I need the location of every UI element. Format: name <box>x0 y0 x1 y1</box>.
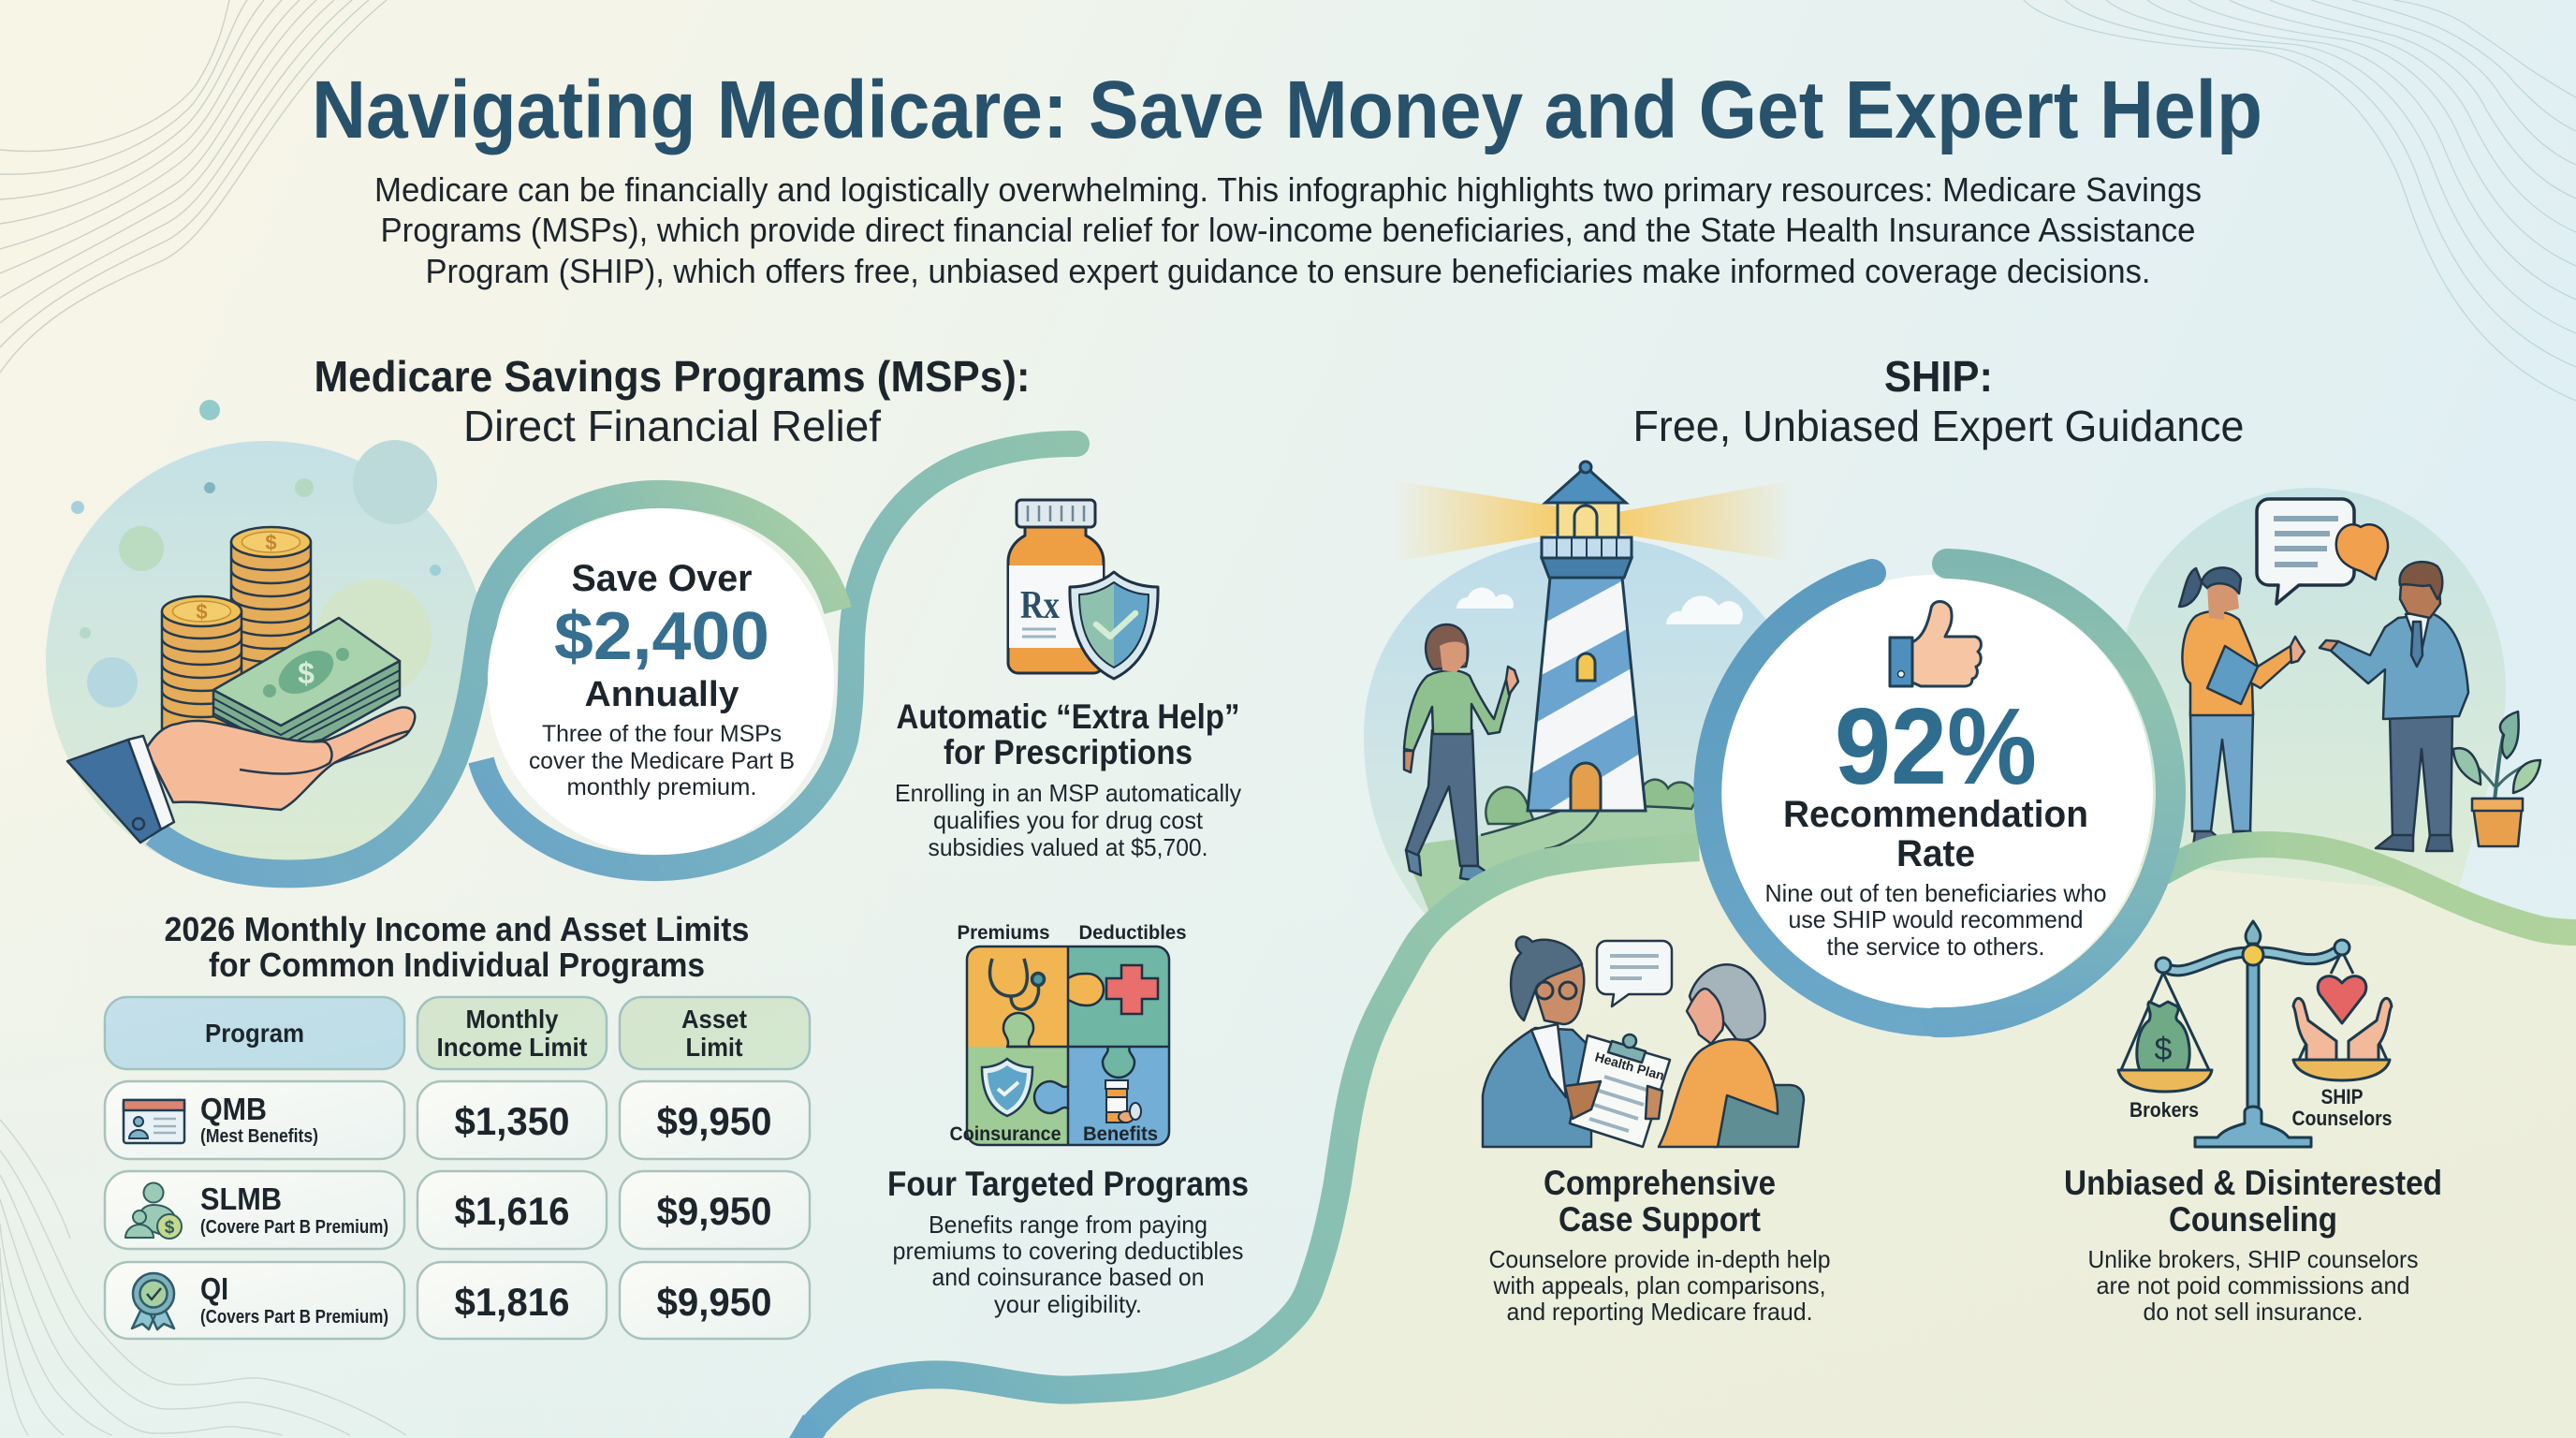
row: QMB: QMB <box>200 1092 267 1126</box>
icon: people with coin: $ <box>165 1218 175 1238</box>
row: QI: QI <box>200 1271 228 1306</box>
man in suit <box>2320 562 2468 851</box>
heading: MSP section: Direct Financial Relief <box>463 402 881 450</box>
puzzle labels <box>949 922 1187 1145</box>
walking woman <box>1404 624 1518 883</box>
woman with tablet <box>2179 567 2305 851</box>
row: QMB: $1,350 <box>455 1099 569 1143</box>
puzzle labels: Benefits <box>1083 1123 1158 1145</box>
clouds <box>1456 588 1743 624</box>
text: case support: with appeals, plan comparisons, <box>1493 1271 1825 1299</box>
background circle <box>2118 488 2506 894</box>
stat circle: save over $2,400: Annually <box>584 675 739 714</box>
counselor <box>1483 1028 1591 1147</box>
puzzle labels: Coinsurance <box>949 1123 1061 1145</box>
stat circle: save over $2,400: Three of the four MSPs <box>542 721 782 747</box>
table header: Income Limit <box>436 1033 588 1062</box>
row: SLMB: (Covere Part B Premium) <box>200 1217 388 1238</box>
illustration: counselor with client: Health Plan <box>1593 1049 1666 1083</box>
background wave lines: top right <box>2024 0 2576 401</box>
scale labels <box>2130 1085 2393 1130</box>
icon: award ribbon <box>132 1273 174 1329</box>
illustration: lighthouse scene <box>1364 462 1794 922</box>
stat circle: 92% recommendation rate: Recommendation <box>1783 794 2088 835</box>
intro paragraph <box>374 170 2202 290</box>
row: QI <box>105 1262 810 1339</box>
scale labels: Brokers <box>2130 1098 2199 1122</box>
cash stack <box>213 618 400 749</box>
text: automatic extra help: subsidies valued at $5,700. <box>929 833 1208 861</box>
text: four targeted programs: premiums to covering deductibles <box>893 1237 1243 1265</box>
potted plant <box>2453 712 2540 846</box>
clipboard <box>1570 1035 1670 1147</box>
row: SLMB: $1,616 <box>455 1189 569 1233</box>
text: unbiased counseling: Unlike brokers, SHIP counselors <box>2087 1245 2419 1273</box>
text: unbiased counseling <box>2064 1164 2442 1326</box>
text: four targeted programs <box>887 1165 1249 1318</box>
panel: automatic extra help <box>895 500 1241 861</box>
front coin stack: $ <box>196 600 208 624</box>
chair <box>1714 1085 1804 1147</box>
intro paragraph: Program (SHIP), which offers free, unbiased expert guidance to ensure beneficiaries make informed coverage decisions. <box>425 252 2151 290</box>
intro paragraph: Medicare can be financially and logistically overwhelming. This infographic highlights two primary resources: Medicare Savings <box>374 170 2202 209</box>
front coin stack <box>162 596 242 730</box>
background wave lines: top left <box>0 0 387 373</box>
row: SLMB: $9,950 <box>657 1189 771 1233</box>
illustration: savings circle with bubbles <box>46 400 488 883</box>
text: automatic extra help: Enrolling in an MSP automatically <box>895 779 1241 807</box>
red cross <box>1106 965 1158 1014</box>
stat circle: save over $2,400: cover the Medicare Part B <box>529 748 795 774</box>
suit cuff <box>67 740 161 843</box>
icon: thumbs up <box>1890 601 1981 686</box>
text: unbiased counseling: Counseling <box>2169 1200 2337 1239</box>
income and asset limits table <box>105 997 810 1339</box>
panel: unbiased counseling <box>2064 921 2442 1326</box>
row: QI: (Covers Part B Premium) <box>200 1307 388 1328</box>
illustration: hand holding money <box>67 527 415 843</box>
table header: Asset <box>681 1005 747 1034</box>
intro paragraph: Programs (MSPs), which provide direct financial relief for low-income beneficiaries, and the State Health Insurance Assistance <box>380 211 2196 249</box>
icon: ID card <box>124 1100 184 1143</box>
wave bands <box>154 431 2576 1438</box>
text: four targeted programs: and coinsurance based on <box>932 1263 1204 1291</box>
text: case support: Counselore provide in-depth help <box>1488 1245 1831 1273</box>
lighthouse <box>1526 462 1647 824</box>
title: Navigating Medicare: Save Money and Get Expert Help <box>312 65 2262 155</box>
client <box>1659 1039 1778 1147</box>
stat circle: 92% recommendation rate: Nine out of ten beneficiaries who <box>1765 879 2106 907</box>
light beams <box>1393 480 1794 562</box>
stethoscope <box>990 959 1045 1009</box>
small shield <box>982 1059 1032 1116</box>
heading: MSP section: Medicare Savings Programs (MSPs): <box>315 352 1030 401</box>
icon: people with coin <box>125 1183 182 1239</box>
text: case support <box>1488 1164 1831 1326</box>
table header: Monthly <box>466 1005 559 1034</box>
text: case support: Comprehensive <box>1544 1164 1776 1202</box>
scale labels: SHIP <box>2321 1085 2363 1108</box>
heading: SHIP section: Free, Unbiased Expert Guidance <box>1632 402 2245 450</box>
right-hand lower cream panel <box>805 844 2576 1438</box>
illustration: balance scale: $ <box>2155 1032 2173 1067</box>
scale labels: Counselors <box>2291 1107 2393 1130</box>
row: QMB: (Mest Benefits) <box>200 1126 318 1147</box>
table heading <box>165 910 749 984</box>
icon: puzzle <box>949 922 1187 1145</box>
stat circle: save over $2,400: $2,400 <box>554 599 769 674</box>
heading: SHIP section: SHIP: <box>1884 352 1993 401</box>
panel: comprehensive case support <box>1483 937 1831 1326</box>
text: unbiased counseling: do not sell insurance. <box>2144 1298 2363 1326</box>
table heading: 2026 Monthly Income and Asset Limits <box>165 910 749 948</box>
table header <box>105 997 810 1069</box>
small bottle <box>1105 1080 1141 1123</box>
text: four targeted programs: your eligibility. <box>994 1290 1142 1318</box>
hill <box>1407 780 1699 922</box>
illustration: people talking <box>2118 488 2540 894</box>
icon: prescription bottle with shield <box>1008 500 1158 679</box>
stat circle: save over $2,400: Save Over <box>571 558 753 599</box>
stat circle: 92% recommendation rate <box>1707 564 2171 1022</box>
text: automatic extra help <box>895 697 1241 861</box>
text: four targeted programs: Four Targeted Programs <box>887 1165 1249 1203</box>
back coin stack <box>231 527 311 683</box>
speech bubble <box>2257 499 2388 604</box>
sky circle <box>1364 537 1778 922</box>
text: unbiased counseling: Unbiased & Disinterested <box>2064 1164 2442 1202</box>
row: QI: $9,950 <box>657 1280 771 1324</box>
background wave lines: bottom left <box>0 1120 406 1435</box>
text: four targeted programs: Benefits range from paying <box>929 1211 1208 1239</box>
table header: Program <box>205 1019 304 1048</box>
row: SLMB: SLMB <box>200 1181 282 1216</box>
panel: four targeted programs <box>887 922 1249 1318</box>
hand <box>146 708 415 810</box>
stat circle: save over $2,400 <box>488 508 834 855</box>
stat circle: save over $2,400: monthly premium. <box>567 774 756 800</box>
icon: prescription bottle with shield: Rx <box>1020 584 1060 627</box>
illustration: balance scale <box>2118 921 2392 1147</box>
speech bubble <box>1597 941 1672 1006</box>
text: case support: and reporting Medicare fraud. <box>1507 1298 1812 1326</box>
heading: MSP section <box>315 352 1030 450</box>
table heading: for Common Individual Programs <box>209 946 705 984</box>
back coin stack: $ <box>265 531 277 554</box>
stat circle: 92% recommendation rate: the service to others. <box>1827 932 2044 961</box>
text: automatic extra help: Automatic “Extra Help” <box>897 697 1239 736</box>
table header: Limit <box>685 1033 743 1062</box>
row: QI: $1,816 <box>455 1280 569 1324</box>
puzzle labels: Premiums <box>957 922 1050 944</box>
heading: SHIP section <box>1632 352 2245 450</box>
text: automatic extra help: qualifies you for drug cost <box>933 806 1204 834</box>
puzzle labels: Deductibles <box>1078 922 1187 944</box>
text: unbiased counseling: are not poid commissions and <box>2097 1271 2409 1299</box>
row: QMB <box>105 1081 810 1159</box>
text: automatic extra help: for Prescriptions <box>944 733 1193 771</box>
row: QMB: $9,950 <box>657 1099 771 1143</box>
text: case support: Case Support <box>1559 1200 1761 1239</box>
stat circle: 92% recommendation rate: use SHIP would recommend <box>1788 905 2084 933</box>
stat circle: 92% recommendation rate: Rate <box>1896 833 1975 874</box>
cash stack: $ <box>298 656 315 690</box>
stat circle: 92% recommendation rate: 92% <box>1835 685 2037 807</box>
illustration: counselor with client <box>1483 937 1804 1147</box>
row: SLMB <box>105 1171 810 1249</box>
